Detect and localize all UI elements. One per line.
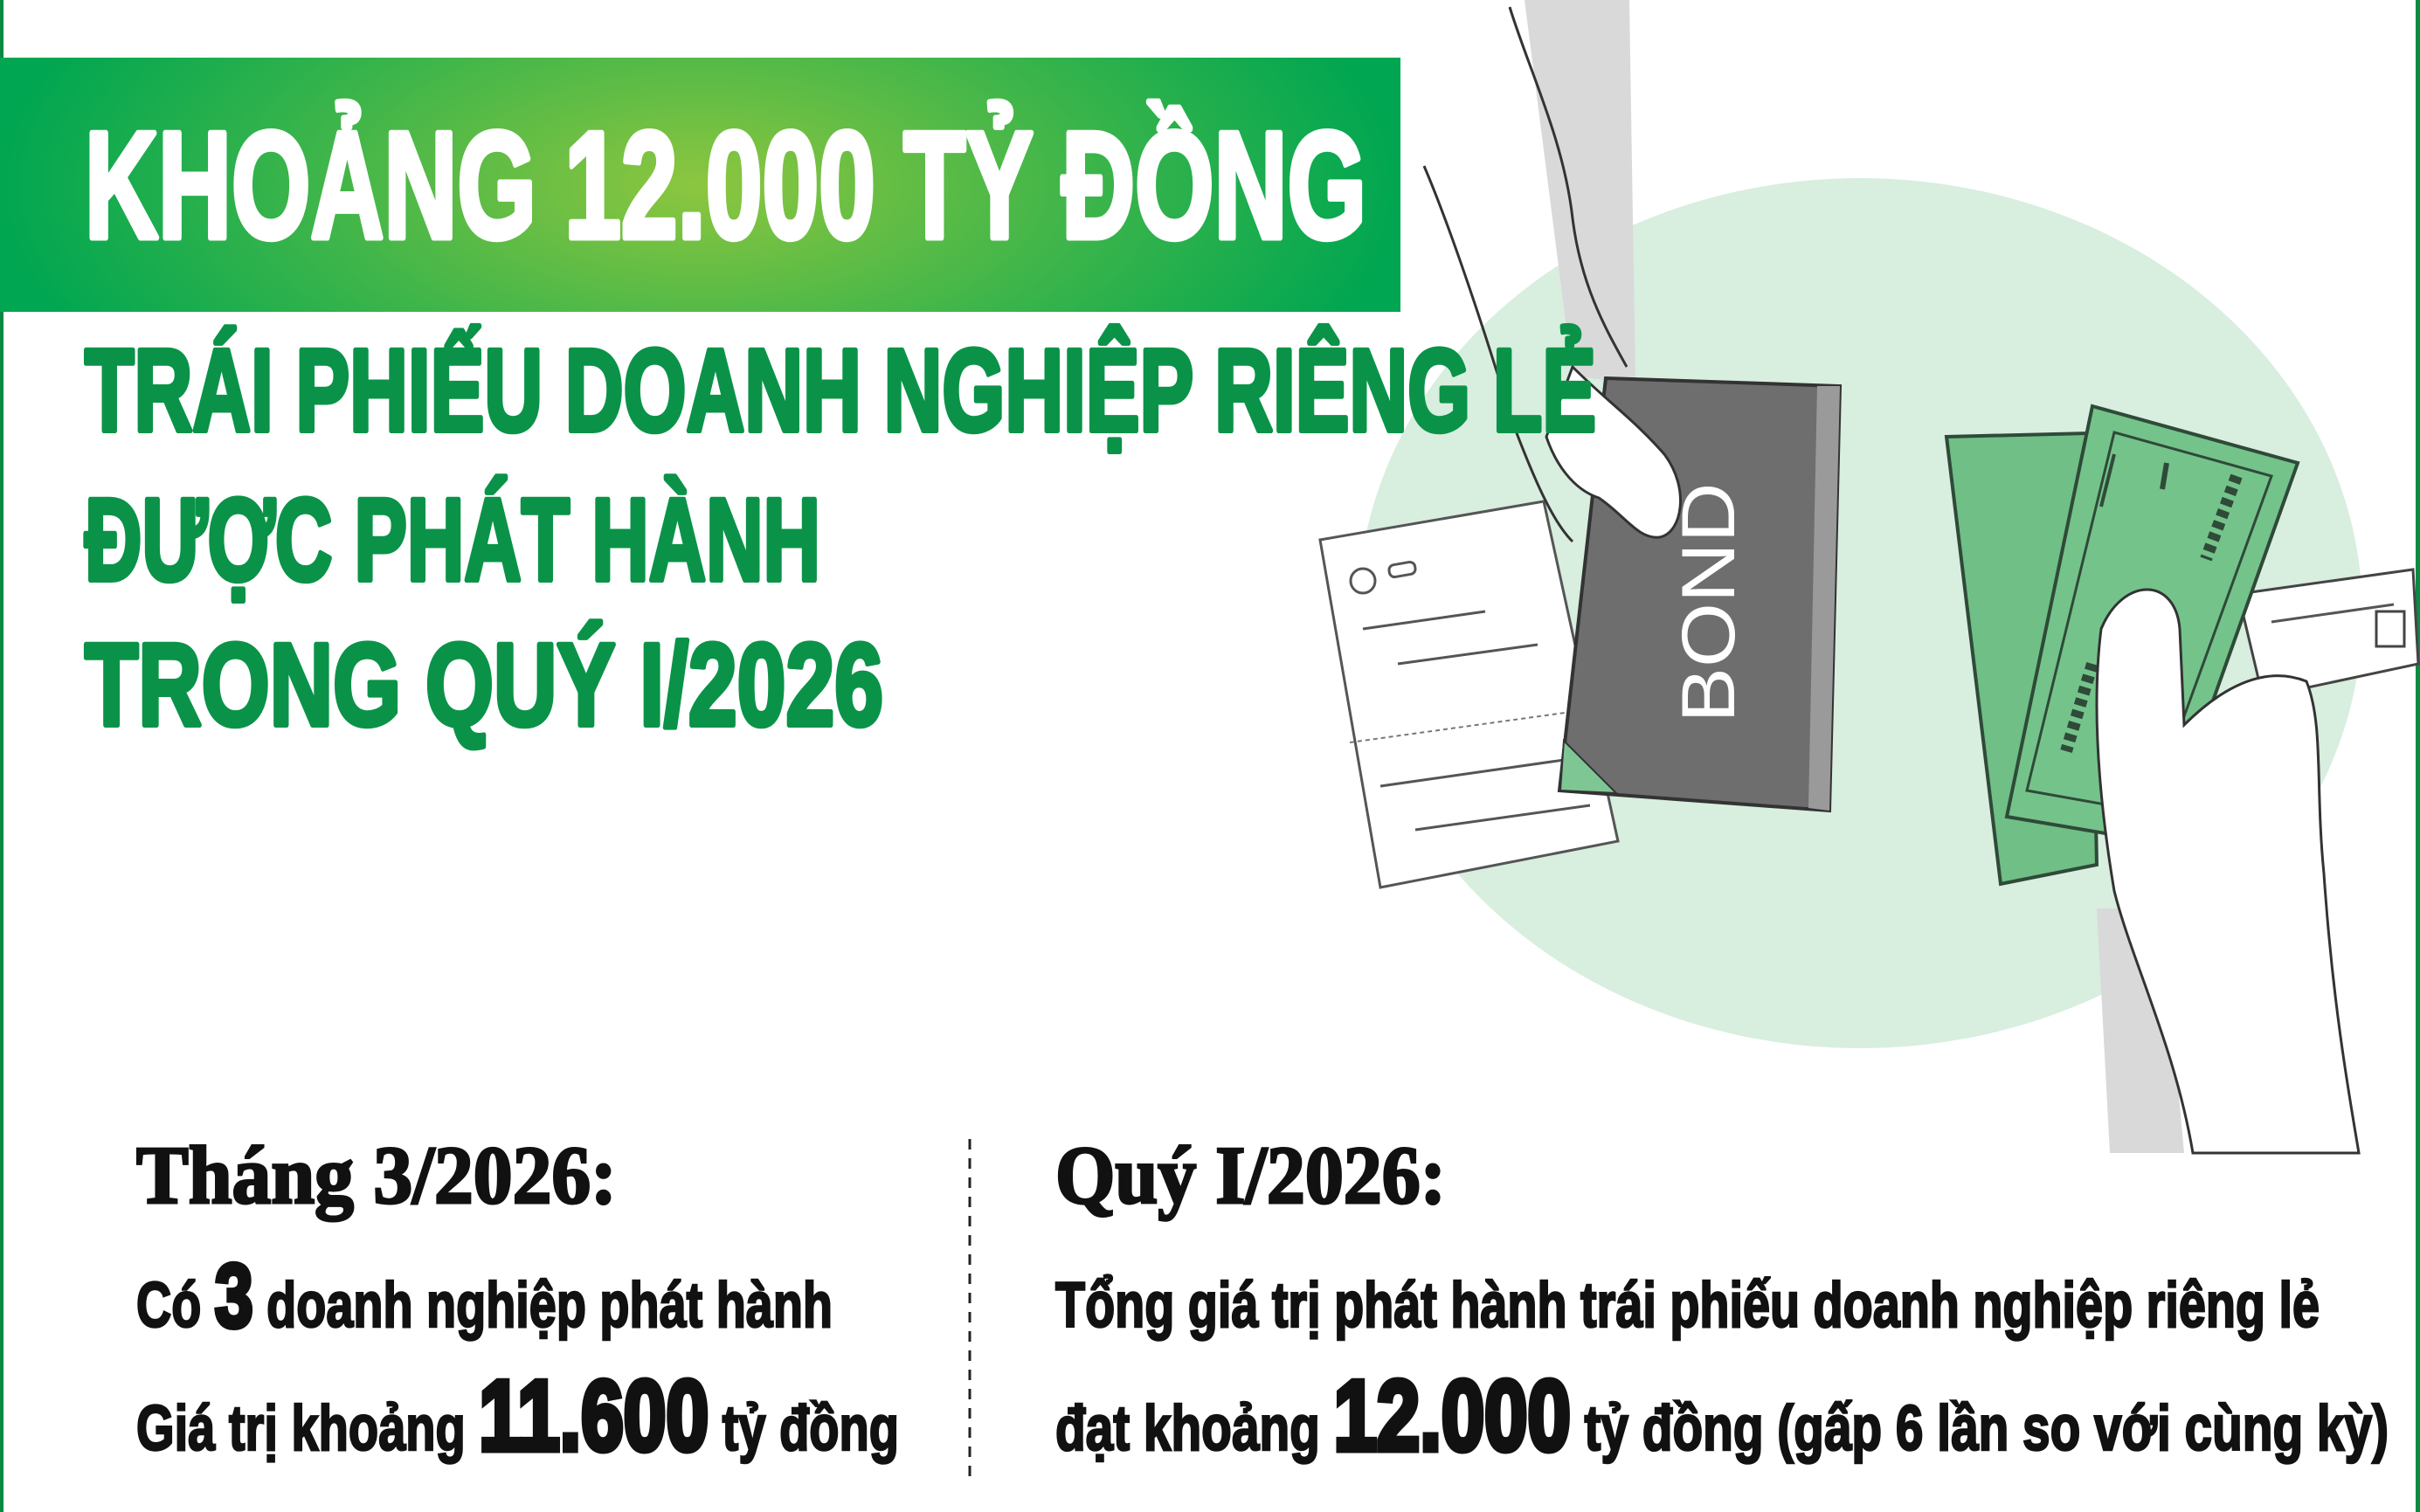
left arm outline xyxy=(1510,7,1627,367)
right sleeve xyxy=(2097,908,2184,1153)
BOND label: BOND xyxy=(1667,482,1751,723)
divider dashed xyxy=(968,1139,971,1476)
hand on book xyxy=(1546,367,1681,537)
panel: Tháng 3/2026: Có 3 doanh nghiệp phát hành xyxy=(136,1246,833,1346)
title banner xyxy=(0,58,1400,312)
background circle xyxy=(1358,178,2362,1048)
card right xyxy=(2238,570,2418,697)
right hand and arm xyxy=(2097,590,2359,1153)
bills xyxy=(1946,406,2298,884)
title text: KHOẢNG 12.000 TỶ ĐỒNG xyxy=(85,100,1366,270)
subtitle: ĐƯỢC PHÁT HÀNH xyxy=(85,475,820,605)
panel: Quý I/2026: Quý I/2026: xyxy=(1055,1130,1446,1221)
panel: Tháng 3/2026: Tháng 3/2026: xyxy=(136,1130,617,1221)
illustration: bond exchange xyxy=(1320,0,2418,1153)
panel: Tháng 3/2026: Giá trị khoảng 11.600 tỷ đồng xyxy=(136,1361,899,1472)
subtitle xyxy=(85,326,1596,750)
panel: Quý I/2026 xyxy=(1055,1130,2389,1472)
subtitle: TRONG QUÝ I/2026 xyxy=(85,620,883,750)
left document xyxy=(1320,501,1618,887)
panel: Tháng 3/2026 xyxy=(136,1130,899,1472)
left sleeve xyxy=(1525,0,1635,384)
book xyxy=(1559,378,1840,811)
subtitle: TRÁI PHIẾU DOANH NGHIỆP RIÊNG LẺ xyxy=(85,326,1596,456)
